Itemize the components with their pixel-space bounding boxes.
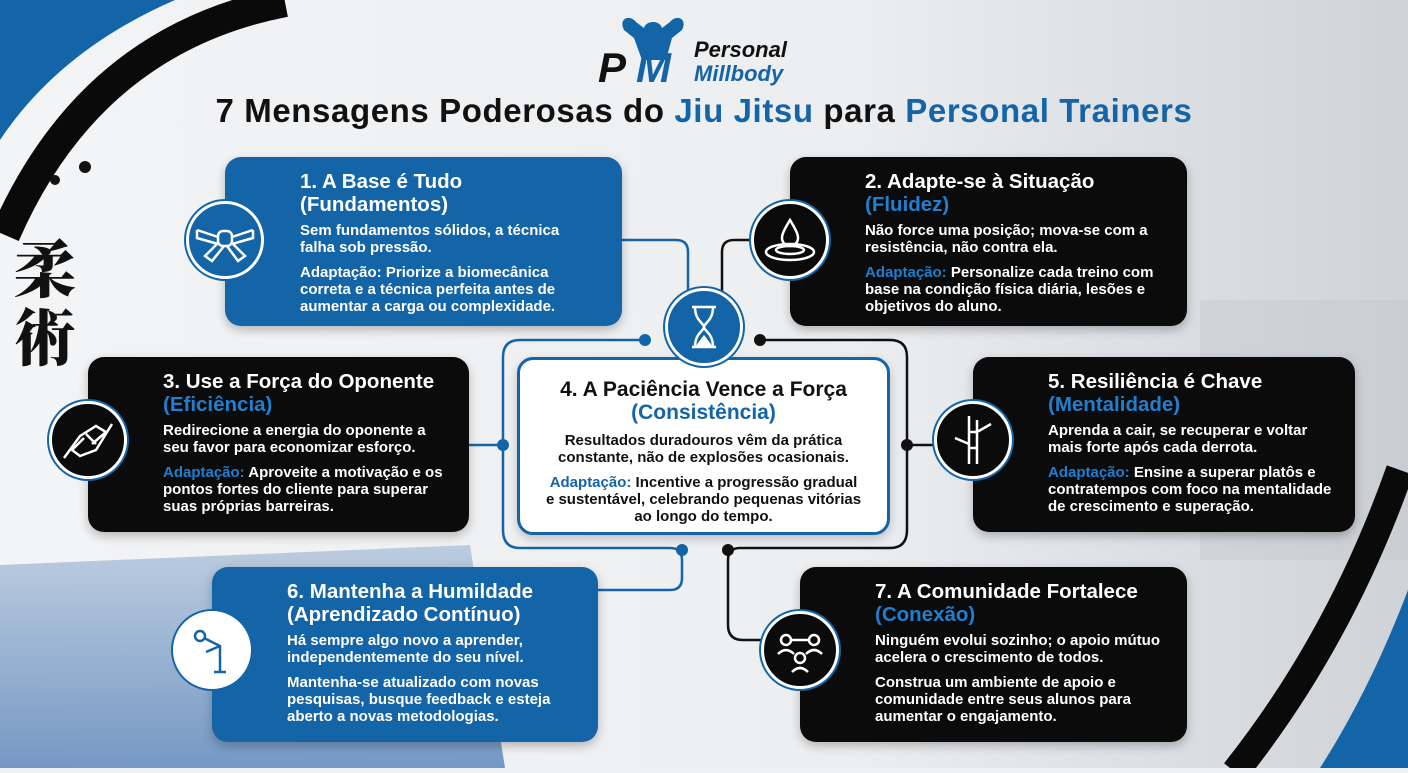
card 2: Não force uma posição; mova-se com a resistência, não contra ela.: [865, 222, 1148, 256]
card 4: constante, não de explosões ocasionais.: [558, 449, 849, 466]
icon: water drop: [751, 201, 829, 279]
card 6: Há sempre algo novo a aprender, independentemente do seu nível.: [287, 632, 524, 666]
card 3: 3. Use a Força do Oponente: [163, 370, 434, 393]
card 3: Redirecione a energia do oponente a seu favor para economizar esforço.: [163, 422, 426, 456]
card 4: Resultados duradouros vêm da prática: [565, 432, 842, 449]
logo: [598, 18, 788, 88]
card 3: Adaptação: Aproveite a motivação e os pontos fortes do cliente para superar suas próprias barreiras.: [163, 464, 443, 515]
card 4: ao longo do tempo.: [634, 508, 773, 525]
card 1: [225, 157, 622, 326]
card 2: [790, 157, 1187, 326]
card 5: Aprenda a cair, se recuperar e voltar mais forte após cada derrota.: [1048, 422, 1307, 456]
card 6: [212, 567, 598, 742]
card 5: (Mentalidade): [1048, 393, 1180, 416]
card 2: 2. Adapte-se à Situação: [865, 170, 1094, 193]
card 3: (Eficiência): [163, 393, 272, 416]
card 4: [517, 357, 890, 535]
card 5: Adaptação: Ensine a superar platôs e contratempos com foco na mentalidade de crescimento e superação.: [1048, 464, 1331, 515]
card 4: e sustentável, celebrando pequenas vitórias: [546, 491, 861, 508]
card 1: (Fundamentos): [300, 193, 448, 216]
card 2: Adaptação: Personalize cada treino com base na condição física diária, lesões e objetivos do aluno.: [865, 264, 1153, 315]
card 1: Sem fundamentos sólidos, a técnica falha sob pressão.: [300, 222, 559, 256]
card 7: Construa um ambiente de apoio e comunidade entre seus alunos para aumentar o engajamento.: [875, 674, 1131, 725]
icon: belt: [186, 201, 264, 279]
card 7: 7. A Comunidade Fortalece: [875, 580, 1138, 603]
card 4: (Consistência): [631, 401, 776, 424]
title: 7 Mensagens Poderosas do Jiu Jitsu para Personal Trainers: [216, 92, 1192, 129]
card 6: 6. Mantenha a Humildade: [287, 580, 533, 603]
card 7: [800, 567, 1187, 742]
card 1: Adaptação: Priorize a biomecânica correta e a técnica perfeita antes de aumentar a carga ou complexidade.: [300, 264, 555, 315]
kanji: [14, 221, 76, 378]
logo: Millbody: [694, 61, 785, 86]
card 7: Ninguém evolui sozinho; o apoio mútuo acelera o crescimento de todos.: [875, 632, 1160, 666]
icon: community: [761, 611, 839, 689]
card 6: Mantenha-se atualizado com novas pesquisas, busque feedback e esteja aberto a novas metodologias.: [287, 674, 550, 725]
card 5: 5. Resiliência é Chave: [1048, 370, 1262, 393]
icon: bowing figure: [173, 611, 251, 689]
card 6: (Aprendizado Contínuo): [287, 603, 520, 626]
logo: Personal: [694, 37, 788, 62]
card 7: (Conexão): [875, 603, 975, 626]
kanji: 柔: [14, 221, 76, 310]
card 1: 1. A Base é Tudo: [300, 170, 462, 193]
card 2: (Fluidez): [865, 193, 949, 216]
kanji: 術: [14, 289, 76, 378]
card 4: Adaptação: Incentive a progressão gradual: [550, 474, 857, 491]
icon: handshake: [49, 401, 127, 479]
card 3: [88, 357, 469, 532]
card 4: 4. A Paciência Vence a Força: [560, 378, 847, 401]
card 5: [973, 357, 1355, 532]
icon: hourglass: [665, 288, 743, 366]
icon: bamboo: [934, 401, 1012, 479]
